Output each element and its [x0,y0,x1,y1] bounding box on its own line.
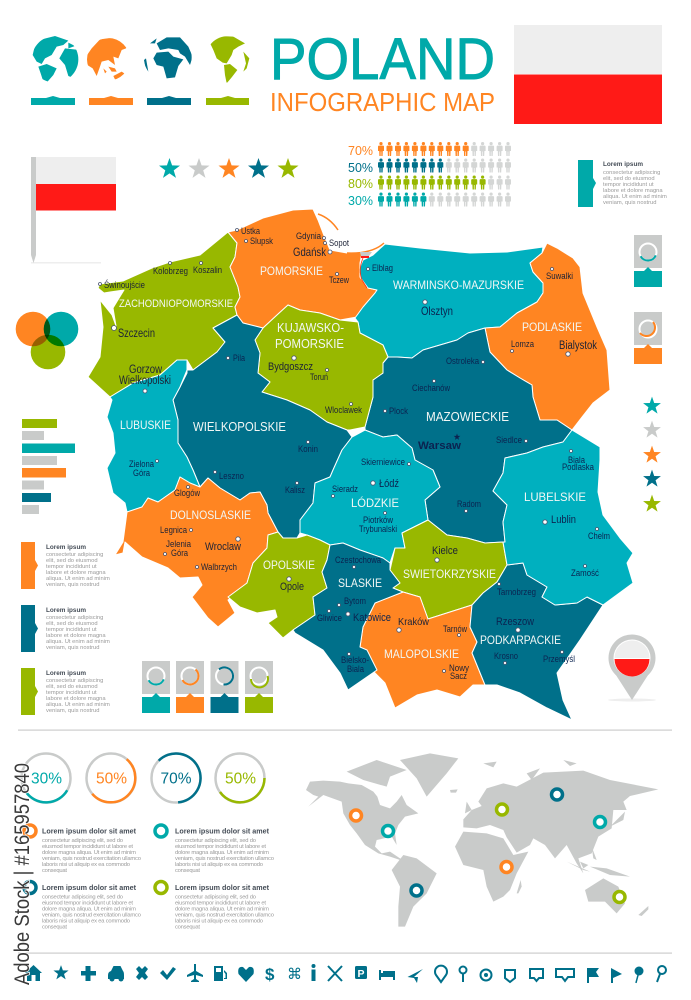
cities: Malopolskie: Tarnów [443,624,467,634]
cities: Lodzkie: Piotrków [363,515,393,525]
callout: orange lorem ipsum: labore et dolore magna [46,570,106,576]
text block: teal: consectetur adipiscing elit, sed do [175,838,256,844]
cities: Wielkopolskie: Leszno [219,471,244,481]
callout: dark teal lorem ipsum: Lorem ipsum [46,607,86,614]
text block: dark teal [24,882,141,930]
cities: Mazowieckie [384,356,528,512]
side gauge card: orange [634,312,662,364]
icon: command: ⌘ [287,965,302,983]
icon: plus [81,966,96,981]
region: Kujawsko-Pomorskie: POMORSKIE [275,336,344,351]
region: Lubuskie: LUBUSKIE [120,418,171,432]
cities: Lubuskie: Zielona [129,459,154,469]
region: Swietokrzyskie: SWIETOKRZYSKIE [403,567,496,581]
cities: Slaskie: Gliwice [317,613,342,623]
cities: Mazowieckie: Siedlce [496,435,522,445]
callout: orange lorem ipsum: aliqua. Ut enim ad minim [46,576,110,582]
cities: Slaskie: Bielsko- [341,655,369,665]
location markers [350,789,625,902]
cities: Lubelskie: Podlaska [562,462,594,472]
row 2 people [378,158,511,172]
cities: Dolnoslaskie [160,486,241,572]
divider top [18,730,672,731]
region: Slaskie [293,543,403,690]
cities: Lubuskie: Gorzow [129,364,163,376]
callout: top right lorem ipsum: consectetur adipiscing [603,170,660,176]
icon row [25,964,666,984]
text block: dark teal: eiusmod tempor incididunt ut labore et [42,900,133,906]
callout: dark teal lorem ipsum: elit, sed do eiusmod [46,621,98,627]
cities: Lubelskie: Chelm [588,531,610,541]
cities: Lubelskie: Lublin [551,514,576,526]
world map [306,753,658,927]
icon: round pin [634,966,644,983]
text block: orange: consectetur adipiscing elit, sed do [42,838,123,844]
side star column [643,397,661,512]
callout: green lorem ipsum: elit, sed do eiusmod [46,684,98,690]
icon: parking: P [358,968,365,980]
text block: dark teal: dolore magna aliqua. Ut enim ad minim [42,906,136,912]
icon: map pin [435,966,447,982]
cities: Malopolskie: Kraków [398,616,429,628]
cities: Mazowieckie: Ciechanów [412,383,450,393]
cities: Lubuskie: Wielkopolski [119,375,171,387]
cities: Warminsko-Mazurskie: Elblag [372,263,393,273]
donut 50% orange [86,754,136,802]
text block: orange: eiusmod tempor incididunt ut labore et [42,844,133,850]
cities: Podkarpackie [494,582,575,664]
donut 50% orange: 50% [96,770,127,788]
cities: Podkarpackie: Przemyśl [543,654,575,664]
icon: car [108,966,124,982]
cities: Wielkopolskie: Konin [298,444,318,454]
icon: navigation arrow [408,969,423,983]
globe caption bars [31,96,249,105]
cities: Wielkopolskie: Kalisz [285,485,305,495]
icon: bed [379,970,395,980]
region: Lodzkie [300,430,440,563]
cities: Malopolskie: Sacz [450,671,467,681]
icon: dark teal globe [144,37,193,78]
icon: cross [136,966,148,980]
cities: Lodzkie: Skierniewice [361,457,405,467]
callout: green lorem ipsum: labore et dolore magna [46,696,106,702]
cities: Opolskie: Opole [280,581,304,593]
donut 70% [152,753,201,802]
callout: orange lorem ipsum: elit, sed do eiusmod [46,558,98,564]
cities: Dolnoslaskie: Jelenia [166,539,191,549]
cities: Podlaskie: Suwalki [546,271,573,281]
region: Wielkopolskie [173,315,352,538]
map of Poland [88,209,633,720]
cities: Dolnoslaskie: Wroclaw [205,541,241,553]
callout: dark teal lorem ipsum [21,605,110,652]
cities: Zachodniopomorskie: Szczecin [118,326,155,340]
region: Dolnoslaskie [115,477,278,627]
donut 30% [22,754,70,802]
cities: Zachodniopomorskie: Świnoujście [104,279,145,290]
cities: Lodzkie: Trybunalski [359,524,397,534]
gauge cards row [142,661,273,713]
capital: Warsaw: Warsaw [418,440,461,452]
callout: dark teal lorem ipsum: tempor incididunt ut [46,627,97,633]
text block: orange [24,825,141,874]
region: Swietokrzyskie [390,520,507,619]
cities: Dolnoslaskie: Legnica [160,525,187,535]
cities: Lodzkie: Łódź [379,478,399,490]
cities: Podkarpackie: Tarnobrzeg [497,587,536,597]
Hel peninsula and Vistula spit [318,214,384,253]
percent labels [348,144,373,208]
text block: teal [155,825,274,874]
cities: Podlaskie [510,268,597,356]
callout: green lorem ipsum: Lorem ipsum [46,670,86,677]
icon: flag [587,968,599,983]
text block: green: consequat [175,924,200,930]
percent labels: 80% [348,177,373,191]
region: Podlaskie: PODLASKIE [522,320,582,334]
cities: Pomorskie: Tczew [329,275,349,285]
cities: Lodzkie: Sieradz [332,484,358,494]
side gauge card: teal [634,235,662,287]
cities: Warminsko-Mazurskie [366,263,453,318]
cities: Kujawsko-Pomorskie [268,356,362,415]
gauge card green [245,661,273,713]
cities: Zachodniopomorskie: Koszalin [193,265,222,275]
cities: Lubelskie [543,450,610,578]
callout: green lorem ipsum [21,668,110,715]
large Polish flag [514,25,662,124]
horizontal bar chart [22,419,75,514]
callout: top right lorem ipsum: labore et dolore magna [603,188,663,194]
cities: Dolnoslaskie: Glogów [174,488,200,498]
region: Kujawsko-Pomorskie: KUJAWSKO- [277,320,344,335]
globes row [31,36,249,105]
cities: Mazowieckie: Radom [457,499,481,509]
cities: Podkarpackie: Rzeszow [496,616,534,628]
region: Pomorskie [228,209,377,328]
text block: teal: laboris nisi ut aliquip ex ea commodo [175,862,263,868]
text block: green: veniam, quis nostrud exercitation ullamco [175,912,274,918]
icon: green globe [209,36,249,83]
callout: dark teal lorem ipsum: aliqua. Ut enim ad minim [46,639,110,645]
region: Lubuskie [107,360,200,512]
region: Lodzkie: LÓDZKIE [351,495,399,510]
cities: Kujawsko-Pomorskie: Toruń [310,372,328,382]
callout: green lorem ipsum: consectetur adipiscing [46,678,103,684]
divider bottom [18,952,672,954]
text block: dark teal: Lorem ipsum dolor sit amet [42,883,136,892]
text block: teal: eiusmod tempor incididunt ut labore et [175,844,266,850]
cities: Lubelskie: Zamość [571,568,599,578]
region: Zachodniopomorskie [88,232,240,397]
donut 50% green: 50% [225,770,256,788]
callout: green lorem ipsum: aliqua. Ut enim ad minim [46,702,110,708]
pin flag [31,157,116,264]
region: Pomorskie: POMORSKIE [260,264,323,278]
donut 50% green [216,754,264,802]
icon: speech bubble [530,969,543,981]
cities: Malopolskie: Nowy [449,663,469,673]
text block: green: laboris nisi ut aliquip ex ea commodo [175,918,263,924]
donut 70%: 70% [160,770,192,788]
cities: Pomorskie: Gdynia [296,231,321,241]
text block: green: eiusmod tempor incididunt ut labore et [175,900,266,906]
percent labels: 70% [348,144,373,158]
text block: green: Lorem ipsum dolor sit amet [175,883,269,892]
text block: teal: consequat [175,868,200,874]
cities: Podlaskie: Lomza [511,339,534,349]
percent labels: 30% [348,194,373,208]
cities: Pomorskie: Gdańsk [293,245,327,259]
donut charts [22,753,264,802]
text block: green: consectetur adipiscing elit, sed do [175,894,256,900]
gauge card orange [176,661,204,713]
text block: dark teal: laboris nisi ut aliquip ex ea commodo [42,918,130,924]
callout: top right lorem ipsum: aliqua. Ut enim ad minim [603,194,667,200]
cities: Wielkopolskie: Pila [233,353,245,363]
cities: Podkarpackie: Krosno [494,651,518,661]
icon: heart [238,967,254,982]
cities: Zachodniopomorskie [98,262,222,340]
cities: Pomorskie: Ustka [241,226,260,236]
callout: top right lorem ipsum: tempor incididunt ut [603,182,654,188]
region: Slaskie: SLASKIE [338,576,382,590]
region: Podlaskie [485,243,610,430]
callout: orange lorem ipsum: consectetur adipiscing [46,552,103,558]
row 3 people [378,176,511,190]
text block: dark teal: consequat [42,924,67,930]
region: Lubelskie: LUBELSKIE [524,490,586,504]
percent labels: 50% [348,161,373,175]
cities: Dolnoslaskie: Góra [171,548,188,558]
region: Kujawsko-Pomorskie [255,305,388,430]
callout: orange lorem ipsum: tempor incididunt ut [46,564,97,570]
icon: orange globe [87,38,126,80]
text block: orange: veniam, quis nostrud exercitation ullamco [42,856,141,862]
callout: dark teal lorem ipsum: labore et dolore magna [46,633,106,639]
region: Opolskie: OPOLSKIE [263,558,315,572]
region: Opolskie [228,532,330,638]
watermark: Adobe Stock id: Adobe Stock | #165957840 [11,763,34,985]
Vistula lagoon marker [360,252,372,258]
title: Poland Infographic Map: POLAND [270,27,495,92]
cities: Zachodniopomorskie: Kolobrzeg [153,266,188,276]
icon: plane [187,964,203,982]
icon: pennant [611,968,622,983]
gauge card dark teal [210,661,238,713]
star rating row [159,158,298,178]
cities: Slaskie: Katowice [353,612,391,624]
text block: dark teal: consectetur adipiscing elit, sed do [42,894,123,900]
cities: Slaskie: Bytom [344,596,366,606]
Elblag boundary accent [360,258,367,288]
callout: top right lorem ipsum: elit, sed do eiusmod [603,176,655,182]
region: Zachodniopomorskie: ZACHODNIOPOMORSKIE [119,298,233,310]
capital: Warsaw [418,433,461,452]
region: Malopolskie: MALOPOLSKIE [384,649,459,661]
callout: top right lorem ipsum: Lorem ipsum [603,161,643,168]
callout: orange lorem ipsum [21,542,110,589]
callout: green lorem ipsum: veniam, quis nostrud [46,708,100,714]
text block: green [155,882,274,930]
text block: teal: Lorem ipsum dolor sit amet [175,826,269,836]
icon: star [53,965,69,979]
cities: Mazowieckie: Plock [389,406,408,416]
text block: teal: veniam, quis nostrud exercitation ullamco [175,856,274,862]
region: Warminsko-Mazurskie [355,244,543,358]
cities: Wielkopolskie [214,353,318,495]
cities: Slaskie: Biala [347,664,364,674]
cities: Swietokrzyskie: Kielce [432,545,458,557]
cities: Mazowieckie: Ostroleka [446,356,479,366]
donut 30%: 30% [31,770,62,788]
cities: Pomorskie [236,226,349,285]
icon: map pin with Polish flag [608,634,656,702]
venn diagram [16,312,78,369]
region: Warminsko-Mazurskie: WARMINSKO-MAZURSKIE [393,278,524,292]
cities: Lubelskie: Biala [568,455,585,465]
cities: Kujawsko-Pomorskie: Wloclawek [325,405,362,415]
icon: dollar: $ [265,965,275,984]
region: Lubelskie [493,430,633,605]
icon: home [25,965,42,981]
gauge card teal [142,661,170,713]
subtitle: INFOGRAPHIC MAP [270,87,495,117]
icon: fuel pump [214,966,227,981]
region: Mazowieckie [365,328,572,543]
cities: Slaskie: Czestochowa [335,555,381,565]
callout: green lorem ipsum: tempor incididunt ut [46,690,97,696]
callout: top right lorem ipsum: veniam, quis nostrud [603,200,656,206]
text block: orange: dolore magna aliqua. Ut enim ad minim [42,850,136,856]
callout: orange lorem ipsum: Lorem ipsum [46,544,86,551]
icon: small map pin [460,966,466,982]
cities: Kujawsko-Pomorskie: Bydgoszcz [268,361,313,373]
icon: check [160,967,176,980]
title: Poland Infographic Map [270,27,495,117]
cities: Pomorskie: Slupsk [250,236,273,246]
text block: orange: Lorem ipsum dolor sit amet [42,826,136,836]
region: Dolnoslaskie: DOLNOSLASKIE [170,508,251,522]
region: Malopolskie [360,592,485,708]
cities: Pomorskie: Sopot [329,238,349,248]
cities: Warminsko-Mazurskie: Olsztyn [421,304,453,318]
callout: top right lorem ipsum [578,160,667,207]
continents [306,753,658,927]
people percentage chart [348,142,511,208]
icon: info [312,964,316,981]
region: Mazowieckie: MAZOWIECKIE [426,409,509,424]
cities: Lubuskie [119,364,171,478]
region: Wielkopolskie: WIELKOPOLSKIE [193,419,286,434]
row 4 people [378,192,511,206]
callout: orange lorem ipsum: veniam, quis nostrud [46,582,100,588]
icon: magnifier [657,966,666,982]
icon: wide speech bubble [556,969,574,981]
text block: dark teal: veniam, quis nostrud exercitation ullamco [42,912,141,918]
cities: Dolnoslaskie: Walbrzych [201,562,237,572]
text block: green: dolore magna aliqua. Ut enim ad minim [175,906,269,912]
text block: orange: laboris nisi ut aliquip ex ea commodo [42,862,130,868]
icon: speech pin [505,970,515,982]
row 1 people [378,142,511,156]
region: Podkarpackie: PODKARPACKIE [480,633,561,647]
region: Podkarpackie [470,563,603,720]
icon: fork and knife [328,966,342,981]
cities: Slaskie [317,555,391,674]
text block: teal: dolore magna aliqua. Ut enim ad minim [175,850,269,856]
cities: Lodzkie [332,457,410,534]
cities: Malopolskie [397,616,469,681]
callout: dark teal lorem ipsum: veniam, quis nostrud [46,645,100,651]
cities: Podlaskie: Bialystok [559,340,597,352]
icon: parking [355,966,367,980]
icon: target [480,970,492,980]
callout: dark teal lorem ipsum: consectetur adipiscing [46,615,103,621]
text block: orange: consequat [42,868,67,874]
icon: teal globe [33,36,80,83]
cities: Lubuskie: Góra [133,468,150,478]
